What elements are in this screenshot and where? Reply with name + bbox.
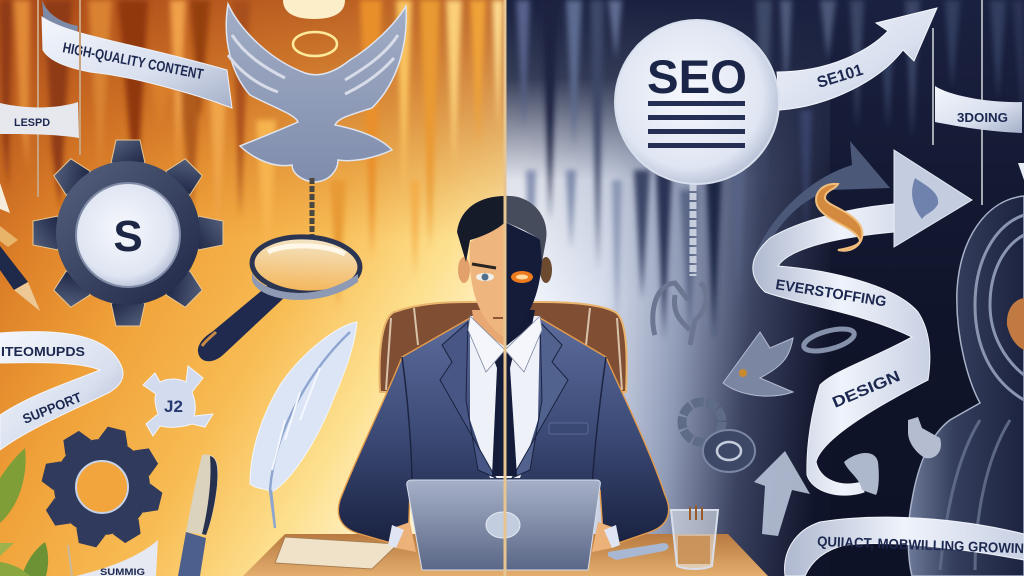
left warm background <box>0 0 506 576</box>
icon: broken shard <box>844 453 879 495</box>
desk <box>243 534 768 576</box>
icon: glass of pencils <box>671 505 718 569</box>
face light half <box>470 222 505 338</box>
ribbon: lead: LESPD <box>14 117 50 129</box>
ears <box>458 257 552 283</box>
hair right <box>505 196 547 262</box>
face dark half <box>505 222 542 338</box>
man at desk, half light half dark <box>338 196 669 570</box>
dark curved arrow <box>752 141 890 262</box>
SEO badge <box>615 20 779 184</box>
icon: pale up arrow <box>754 451 810 536</box>
ribbon: support: ITEOMUPDS <box>1 344 85 359</box>
collar <box>468 316 542 372</box>
right cool background <box>506 0 1024 576</box>
glowing eye <box>511 271 533 283</box>
notepad <box>275 537 398 569</box>
left curtain folds <box>0 0 504 310</box>
hanging strings right <box>933 0 982 205</box>
office chair <box>380 302 627 392</box>
icon: rocket fragment <box>723 332 793 396</box>
right dark zone <box>830 0 1024 576</box>
ribbon: high-quality content <box>42 0 232 108</box>
icon: white triangle fragment <box>0 183 10 213</box>
icon: ring <box>802 325 856 355</box>
chain under SEO badge <box>690 184 696 276</box>
icon: small star badge: J2 <box>164 397 183 416</box>
icon: gear with hole <box>29 414 175 560</box>
ribbon: bottom right headline <box>785 517 1024 576</box>
icon: cloak clasp <box>908 417 941 458</box>
suit jacket <box>338 318 669 548</box>
ribbon: doing: 3DOING <box>957 111 1008 125</box>
SEO badge: SEO <box>647 50 747 103</box>
shirt <box>470 316 540 478</box>
icon: fountain pen <box>178 454 218 576</box>
icon: orange S twist <box>816 184 862 251</box>
icon: broken gears <box>682 402 755 472</box>
icon: hanging hooks <box>653 283 706 345</box>
chain under bird <box>310 178 314 236</box>
hanging strings left <box>38 0 80 197</box>
left top shading <box>0 0 506 240</box>
ribbon: keyword stuffing and design <box>753 204 930 495</box>
neck right <box>505 310 535 347</box>
icon: magnifying glass <box>198 234 361 361</box>
ribbon: keyword stuffing and design: EVERSTOFFING <box>774 277 887 310</box>
icon: feather <box>250 322 357 528</box>
icon: pencil <box>0 226 40 311</box>
icon: gear with S <box>33 140 223 326</box>
hair left <box>457 196 505 262</box>
tie <box>491 352 517 476</box>
SEO arrow ribbon <box>777 8 937 110</box>
ribbon: high-quality content: HIGH-QUALITY CONTENT <box>61 40 205 83</box>
lapel right <box>512 322 568 478</box>
SEO arrow ribbon: SE101 <box>815 62 865 92</box>
play triangle <box>894 150 972 247</box>
neck left <box>472 310 505 347</box>
ribbon: support: SUPPORT <box>21 389 84 427</box>
cuffs and hands <box>388 522 620 552</box>
right top shadow <box>506 0 836 300</box>
laptop <box>407 480 600 570</box>
icon: pen on desk <box>608 543 668 560</box>
light bulb <box>283 0 345 56</box>
icon: leaves <box>0 448 48 576</box>
ribbon: support <box>0 332 123 450</box>
icon: gear with S: S <box>113 212 143 261</box>
eye light <box>472 264 503 318</box>
hooded figure <box>908 196 1024 576</box>
centre divider line <box>504 0 506 576</box>
ribbon: doing <box>935 86 1022 133</box>
lapel left <box>440 322 496 478</box>
ribbon: bottom left fragment <box>68 540 158 576</box>
right curtain folds <box>516 0 1024 340</box>
ribbon: keyword stuffing and design: DESIGN <box>830 368 903 412</box>
white hat bird emblem <box>226 4 406 182</box>
icon: small star badge <box>143 366 213 436</box>
ribbon: lead <box>0 102 79 138</box>
icon: white arrow tip at right edge <box>1018 163 1024 180</box>
